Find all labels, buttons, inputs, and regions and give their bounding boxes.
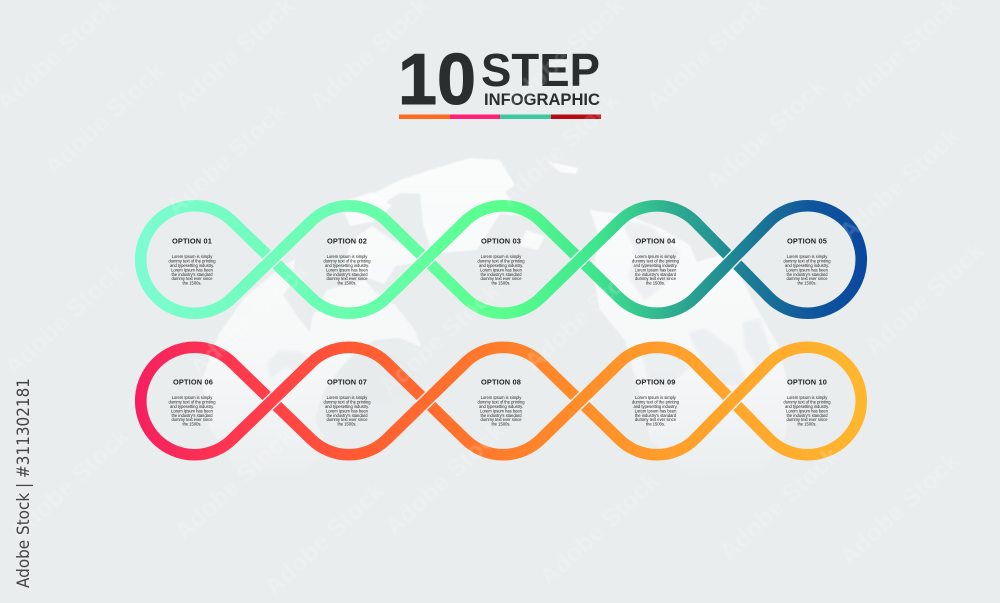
option 04: the industry's standard xyxy=(635,272,677,277)
option 10: the industry's standard xyxy=(786,413,828,418)
option 10: the 1500s. xyxy=(797,422,817,427)
option 07: and typesetting industry. xyxy=(325,404,369,409)
option 03: the 1500s. xyxy=(491,281,511,286)
stock id side label: Adobe Stock | #311302181 xyxy=(14,378,34,588)
option 06: the industry's standard xyxy=(171,413,213,418)
option 09: the industry's standard xyxy=(635,413,677,418)
option 05: OPTION 05 xyxy=(787,236,827,246)
option 04: dummy text of the printing xyxy=(632,258,680,264)
option 08: dummy text of the printing xyxy=(477,400,525,404)
title colour bar xyxy=(399,114,601,119)
top chain over strands xyxy=(232,222,770,298)
option 06: dummy text ever since xyxy=(172,417,213,422)
option 07: the 1500s. xyxy=(337,422,357,427)
stock watermarks: Adobe Stock xyxy=(519,252,650,376)
option 09: and typesetting industry. xyxy=(633,404,678,409)
option 02: dummy text ever since xyxy=(327,276,368,281)
option 07 xyxy=(323,378,371,427)
option 10: OPTION 10 xyxy=(787,378,827,386)
option 09: the 1500s. xyxy=(646,422,665,427)
option 08: Lorem Ipsum has been xyxy=(480,408,523,413)
top chain ribbon xyxy=(141,206,861,313)
option 06: the 1500s. xyxy=(182,422,202,427)
option 05: Lorem Ipsum is simply xyxy=(787,254,828,259)
bottom chain over strands xyxy=(232,363,770,439)
option 10: dummy text ever since xyxy=(787,417,828,422)
stock watermarks: Adobe Stock xyxy=(379,417,510,541)
option 05 xyxy=(783,236,831,286)
option 02: and typesetting industry. xyxy=(325,263,369,268)
option 05: the industry's standard xyxy=(786,272,828,277)
option 07: the industry's standard xyxy=(326,413,368,418)
option 06: Lorem Ipsum has been xyxy=(171,408,214,413)
stock watermarks: Adobe Stock xyxy=(374,277,505,401)
option 08: dummy text ever since xyxy=(481,417,522,422)
stock watermarks: Adobe Stock xyxy=(161,97,292,221)
title word infographic: INFOGRAPHIC xyxy=(484,91,600,109)
option 08 xyxy=(477,378,525,427)
option 09: Lorem Ipsum is simply xyxy=(635,395,677,400)
option 09: dummy text of the printing xyxy=(632,400,680,404)
option 04 xyxy=(632,236,680,286)
option 10: dummy text of the printing xyxy=(783,400,831,404)
top chain: options 01 to 05 xyxy=(141,206,861,313)
option 02: Lorem Ipsum has been xyxy=(326,267,369,272)
stock watermarks: Adobe Stock xyxy=(834,447,965,571)
title number: 10 xyxy=(398,40,476,120)
option 01: Lorem Ipsum is simply xyxy=(172,254,213,259)
option 04: dummy text ever since xyxy=(635,276,677,281)
option 05: dummy text ever since xyxy=(787,276,828,281)
option 05: the 1500s. xyxy=(797,281,817,286)
title xyxy=(398,40,600,120)
option 08: the 1500s. xyxy=(491,422,511,427)
option 07: Lorem Ipsum is simply xyxy=(327,395,368,400)
globe grey land patches xyxy=(267,220,772,408)
stock watermarks: Adobe Stock xyxy=(184,257,315,381)
option 01: and typesetting industry. xyxy=(170,263,214,268)
option 04: and typesetting industry. xyxy=(633,263,678,268)
option 10: Lorem Ipsum is simply xyxy=(787,395,828,400)
option 10: Lorem Ipsum has been xyxy=(786,408,829,413)
option 01: Lorem Ipsum has been xyxy=(171,267,214,272)
option 10: and typesetting industry. xyxy=(785,404,829,409)
option 02 xyxy=(323,236,371,286)
option 04: the 1500s. xyxy=(646,281,665,286)
option 05: dummy text of the printing xyxy=(783,258,831,264)
option 03: OPTION 03 xyxy=(481,236,521,246)
option 06 xyxy=(168,378,216,427)
stock watermarks: Adobe Stock xyxy=(169,422,300,546)
stock watermarks: Adobe Stock xyxy=(494,87,625,211)
option 01: the 1500s. xyxy=(182,281,202,286)
option 03: dummy text of the printing xyxy=(477,258,525,264)
option 07: Lorem Ipsum has been xyxy=(326,408,369,413)
option 07: dummy text of the printing xyxy=(323,400,371,404)
option 01: dummy text of the printing xyxy=(168,258,216,264)
bottom chain: options 06 to 10 xyxy=(141,347,861,455)
stock watermarks: Adobe Stock xyxy=(534,467,665,591)
option 04: Lorem Ipsum has been xyxy=(635,267,677,272)
option 01: OPTION 01 xyxy=(172,236,212,246)
option 01: dummy text ever since xyxy=(172,276,213,281)
option 03 xyxy=(477,236,525,286)
option 06: Lorem Ipsum is simply xyxy=(172,395,213,400)
option 04: OPTION 04 xyxy=(636,236,676,246)
stock watermarks: Adobe Stock xyxy=(714,442,845,566)
option 01: the industry's standard xyxy=(171,272,213,277)
option 02: the 1500s. xyxy=(337,281,357,286)
option 04: Lorem Ipsum is simply xyxy=(635,254,677,259)
stock watermarks: Adobe Stock xyxy=(0,257,130,381)
option 02: Lorem Ipsum is simply xyxy=(327,254,368,259)
option 08: the industry's standard xyxy=(480,413,522,418)
option 06: OPTION 06 xyxy=(173,378,213,386)
bottom chain ribbon xyxy=(141,347,861,455)
world map globe xyxy=(202,158,792,476)
option 06: and typesetting industry. xyxy=(170,404,214,409)
option 08: Lorem Ipsum is simply xyxy=(481,395,522,400)
stock watermarks: Adobe Stock xyxy=(701,72,832,196)
option 03: Lorem Ipsum has been xyxy=(480,267,523,272)
bottom chain crossing gaps xyxy=(265,394,739,408)
option 03: Lorem Ipsum is simply xyxy=(481,254,522,259)
option 03: the industry's standard xyxy=(480,272,522,277)
stock watermarks: Adobe Stock xyxy=(39,57,170,181)
stock watermarks: Adobe Stock xyxy=(834,122,965,246)
option 10 xyxy=(783,378,831,427)
option 03: and typesetting industry. xyxy=(479,263,523,268)
option 03: dummy text ever since xyxy=(481,276,522,281)
stock watermarks: Adobe Stock xyxy=(259,477,390,601)
option 09: OPTION 09 xyxy=(636,378,675,386)
option 06: dummy text of the printing xyxy=(168,400,216,404)
title word step: STEP xyxy=(481,44,600,96)
option 08: OPTION 08 xyxy=(481,378,521,386)
option 09: Lorem Ipsum has been xyxy=(635,408,677,413)
option 08: and typesetting industry. xyxy=(479,404,523,409)
option 07: dummy text ever since xyxy=(327,417,368,422)
option 02: the industry's standard xyxy=(326,272,368,277)
option 05: and typesetting industry. xyxy=(785,263,829,268)
option 09 xyxy=(632,378,680,427)
option 07: OPTION 07 xyxy=(327,378,367,386)
option 09: dummy text ever since xyxy=(635,417,677,422)
option 02: dummy text of the printing xyxy=(323,258,371,264)
stock watermarks: Adobe Stock xyxy=(4,422,135,546)
option 02: OPTION 02 xyxy=(327,236,367,246)
top chain crossing gaps xyxy=(265,253,739,266)
option 05: Lorem Ipsum has been xyxy=(786,267,829,272)
stock watermarks: Adobe Stock xyxy=(859,237,990,361)
option 01 xyxy=(168,236,216,286)
